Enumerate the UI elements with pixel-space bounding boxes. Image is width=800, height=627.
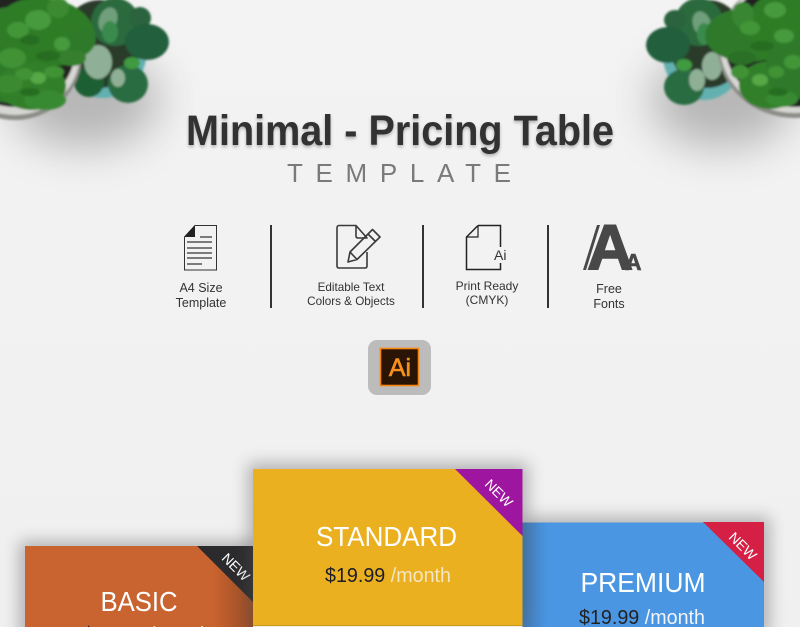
plan name: BASIC: [100, 586, 178, 617]
plan name: STANDARD: [316, 521, 457, 552]
card: premium: [522, 517, 770, 627]
icon: document with pencil: [337, 226, 380, 268]
plants: top right: [646, 0, 800, 118]
label: print ready: Print Ready: [456, 279, 518, 293]
ribbon: new: NEW: [219, 550, 254, 585]
label: A4 size template: A4 Size: [179, 281, 223, 295]
label: free fonts: Fonts: [593, 297, 625, 311]
icon: page with Ai: Ai: [494, 247, 506, 263]
feature: A4 size: [176, 225, 226, 310]
card: basic: [19, 541, 259, 627]
ribbon: new: [197, 546, 254, 602]
label: print ready: (CMYK): [466, 293, 508, 307]
title: Minimal - Pricing Table: [186, 107, 614, 155]
plant shadow: right: [650, 52, 794, 148]
icon: letters A: A: [625, 249, 642, 275]
plant shadow: left: [10, 52, 160, 148]
ribbon: new: NEW: [726, 529, 761, 564]
label: editable text: Colors & Objects: [307, 295, 395, 308]
feature: print ready: [456, 226, 518, 307]
ribbon: new: [703, 522, 764, 582]
feature: editable: [307, 226, 395, 308]
plants: top left: [0, 0, 169, 120]
badge: Adobe Illustrator: Ai: [389, 354, 411, 382]
plan name: PREMIUM: [580, 567, 706, 598]
icon: letters A: A: [587, 212, 633, 284]
price: $19.99 /month: [325, 565, 451, 587]
label: free fonts: Free: [596, 282, 622, 296]
feature: free fonts: [583, 212, 642, 311]
ribbon: new: [455, 469, 522, 536]
label: A4 size template: Template: [176, 296, 226, 310]
icon: A4 document: [184, 225, 216, 270]
subtitle: TEMPLATE: [287, 158, 511, 188]
badge: Adobe Illustrator: [368, 340, 431, 395]
label: editable text: Editable Text: [318, 281, 385, 294]
card: standard: [248, 463, 528, 627]
ribbon: new: NEW: [482, 476, 517, 511]
